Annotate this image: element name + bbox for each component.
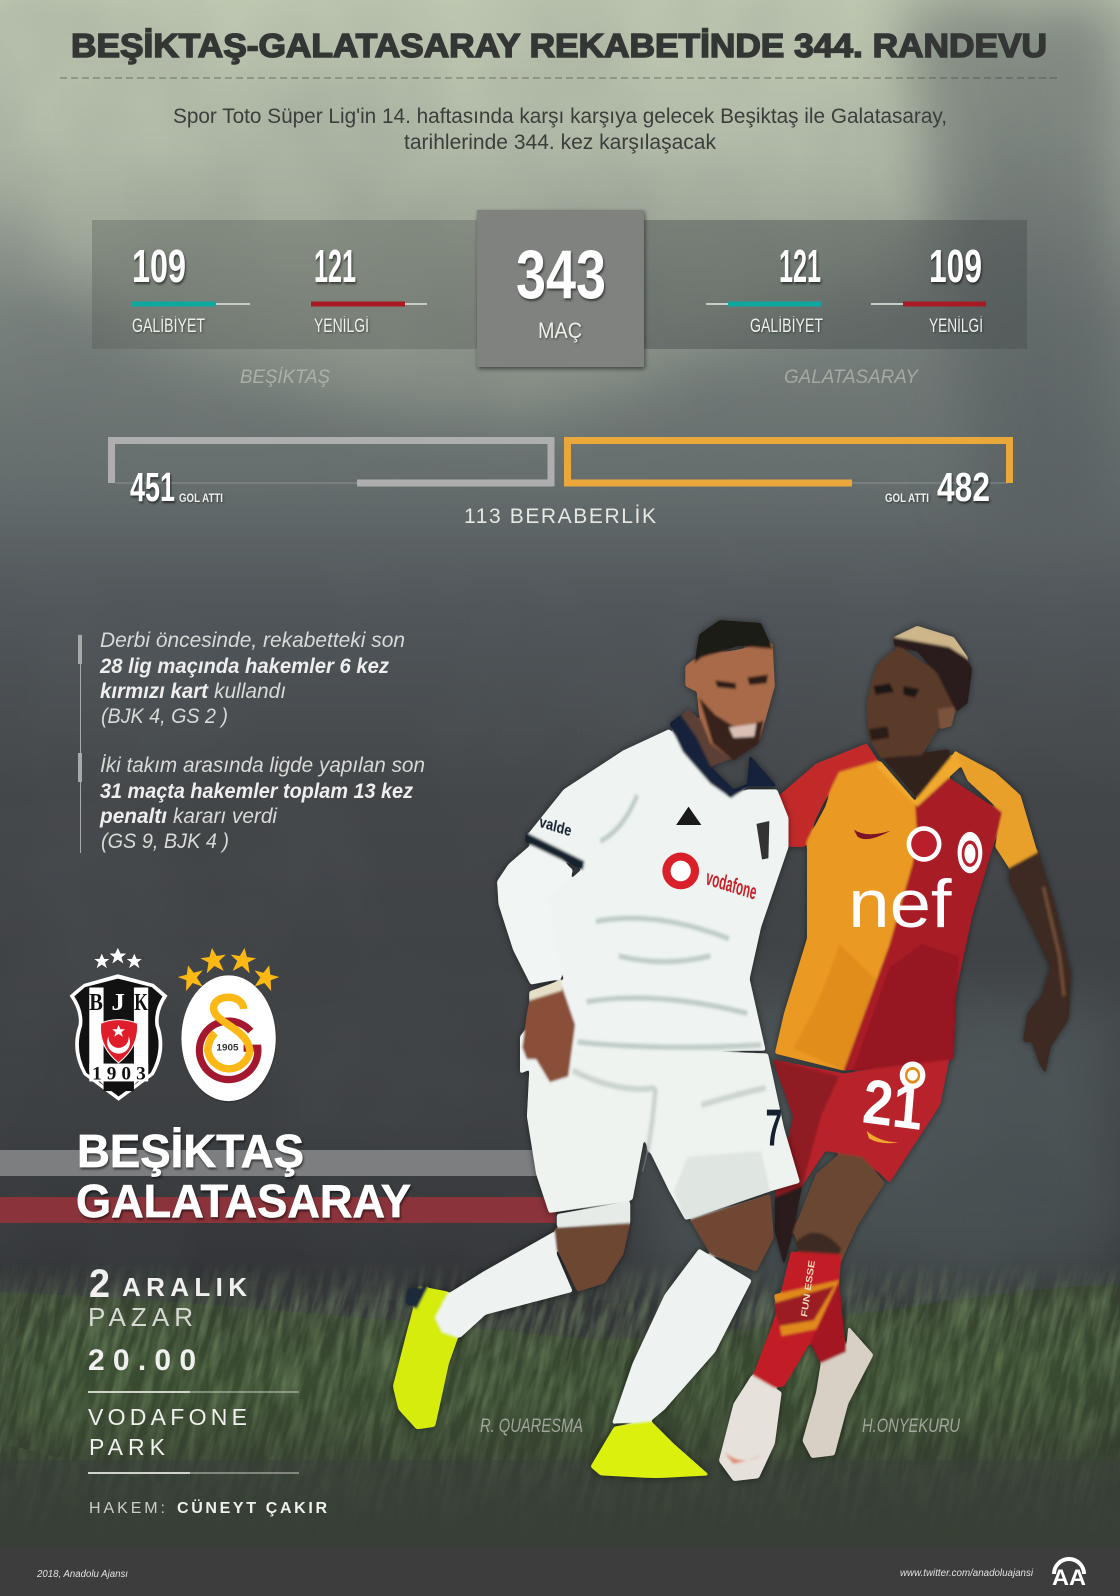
fact: red cards: 28 lig maçında hakemler 6 kez <box>99 655 389 678</box>
left boot <box>393 1286 458 1429</box>
stat: Galatasaray losses: YENİLGİ <box>929 316 983 337</box>
arm sleeve <box>497 838 573 985</box>
title: BEŞİKTAŞ-GALATASARAY REKABETİNDE 344. RANDEVU <box>71 27 1047 64</box>
label: Galatasaray: GALATASARAY <box>784 367 919 388</box>
shirt red panel <box>844 778 1002 1071</box>
back leg <box>775 1185 802 1266</box>
kit details: Galatasaray: FUN ESSE <box>800 1259 818 1318</box>
kit details: Beşiktaş <box>538 807 782 1156</box>
footer bar: www.twitter.com/anadoluajansi <box>900 1568 1034 1579</box>
fact: penalties: İki takım arasında ligde yapılan son <box>100 754 425 777</box>
fact: penalties: kararı verdi <box>173 805 278 828</box>
icon: Galatasaray crest: 1905 <box>216 1043 239 1054</box>
collar <box>876 750 961 807</box>
fact: penalties: penaltı <box>99 805 167 828</box>
stat: Beşiktaş wins <box>132 240 250 337</box>
intro text: Spor Toto Süper Lig'in 14. haftasında karşı karşıya gelecek Beşiktaş ile Galatasaray, <box>173 105 947 128</box>
hair <box>694 620 773 663</box>
panel: Beşiktaş stats <box>92 220 478 349</box>
panel: total matches: MAÇ <box>538 318 582 343</box>
sleeve band <box>525 832 584 870</box>
fact: red cards: Derbi öncesinde, rekabetteki son <box>100 629 405 652</box>
fact: penalties: 31 maçta hakemler toplam 13 kez <box>100 780 413 803</box>
footer bar: 2018, Anadolu Ajansı <box>36 1569 128 1580</box>
player: R. Quaresma <box>393 620 800 1478</box>
stat: Beşiktaş losses: YENİLGİ <box>314 316 369 337</box>
kit details: Beşiktaş: valde <box>538 814 573 841</box>
fact: penalties: (GS 9, BJK 4 ) <box>101 830 229 853</box>
icon: Anadolu Agency logo: AA <box>1052 1565 1086 1590</box>
shirt <box>520 729 789 1074</box>
left thigh <box>554 1223 630 1292</box>
shorts <box>527 1048 800 1220</box>
match heading: GALATASARAY <box>76 1175 411 1227</box>
player name: Quaresma: R. QUARESMA <box>480 1416 583 1437</box>
fact: red cards: (BJK 4, GS 2 ) <box>101 705 228 728</box>
neck and face <box>674 709 743 766</box>
match details: PARK <box>89 1434 166 1460</box>
kit details: Beşiktaş: vodafone <box>704 866 759 905</box>
kit details: Beşiktaş: 7 <box>766 1099 782 1156</box>
face <box>867 646 958 758</box>
stat: Galatasaray wins: 121 <box>779 240 821 292</box>
stat: Galatasaray wins: GALİBİYET <box>750 316 823 337</box>
icon: three white stars <box>93 947 143 969</box>
left sock <box>435 1231 573 1338</box>
match details: 2 <box>89 1262 110 1306</box>
shirt orange sleeve <box>954 750 1037 868</box>
collar <box>669 715 777 798</box>
icon: Beşiktaş crest <box>70 947 167 1101</box>
match details: CÜNEYT ÇAKIR <box>177 1498 327 1517</box>
back boot <box>802 1326 874 1458</box>
kit details: Galatasaray: nef <box>848 865 953 942</box>
shirt orange body <box>775 761 917 1071</box>
match details <box>88 1262 327 1517</box>
kit details: Galatasaray: 21 <box>860 1066 926 1144</box>
number: goals scored by Beşiktaş: GOL ATTI <box>179 491 223 505</box>
arm <box>1009 850 1071 1074</box>
stat: Beşiktaş wins: 109 <box>132 240 186 292</box>
fact: red cards: kırmızı kart <box>100 680 209 703</box>
hand <box>522 985 575 1082</box>
icon: Galatasaray crest <box>176 946 282 1101</box>
under-shorts <box>557 1202 630 1227</box>
right knee <box>690 1194 774 1272</box>
match details: PAZAR <box>88 1302 193 1332</box>
match heading: BEŞİKTAŞ <box>77 1125 304 1177</box>
panel: total matches <box>477 210 644 367</box>
number: goals scored by Beşiktaş: 451 <box>130 464 175 510</box>
draws count: 113 BERABERLİK <box>464 505 656 528</box>
match details: ARALIK <box>122 1272 247 1302</box>
right sock <box>612 1249 752 1424</box>
icon: Beşiktaş crest: 1903 <box>92 1063 146 1084</box>
match details: HAKEM: <box>89 1500 165 1517</box>
footer bar <box>0 1547 1120 1596</box>
kit details: Galatasaray <box>800 826 982 1318</box>
icon: Beşiktaş crest: B <box>89 989 103 1016</box>
panel: total matches: 343 <box>516 236 606 313</box>
match heading <box>76 1125 411 1227</box>
shorts <box>773 1059 949 1197</box>
thigh <box>793 1154 885 1269</box>
number: goals scored by Galatasaray: GOL ATTI <box>885 491 929 505</box>
number: goals scored by Galatasaray <box>885 464 990 510</box>
banner stripes <box>0 1150 556 1223</box>
fact: penalties <box>78 753 425 853</box>
chart: Galatasaray goals bracket <box>568 440 1010 510</box>
panel: Galatasaray stats <box>644 220 1027 349</box>
player name: Onyekuru: H.ONYEKURU <box>862 1416 960 1437</box>
hair <box>893 626 972 712</box>
background: blurred grass field <box>0 1260 1120 1547</box>
shirt red sleeve <box>779 744 878 847</box>
label: Beşiktaş: BEŞİKTAŞ <box>240 367 330 388</box>
number: goals scored by Galatasaray: 482 <box>937 464 990 510</box>
icon: four gold stars <box>176 946 282 992</box>
player: H. Onyekuru <box>719 626 1071 1481</box>
match details: 20.00 <box>88 1344 196 1377</box>
stat: Galatasaray losses <box>871 240 986 337</box>
sock <box>751 1251 841 1389</box>
stat: Galatasaray wins <box>706 240 823 337</box>
stat: Beşiktaş losses <box>311 240 427 337</box>
fact: red cards: kullandı <box>214 680 286 703</box>
stat: Galatasaray losses: 109 <box>929 240 982 292</box>
chart: Beşiktaş goals bracket <box>112 440 551 510</box>
intro text <box>173 105 947 154</box>
neck <box>883 749 954 798</box>
front boot <box>719 1375 782 1481</box>
match details: VODAFONE <box>88 1404 247 1430</box>
fact: red cards <box>78 629 405 753</box>
right boot <box>590 1421 710 1478</box>
icon: Beşiktaş crest: J <box>111 989 125 1016</box>
stat: Beşiktaş wins: GALİBİYET <box>132 316 205 337</box>
icon: Beşiktaş crest: K <box>134 989 148 1016</box>
stat: Beşiktaş losses: 121 <box>314 240 356 292</box>
intro text: tarihlerinde 344. kez karşılaşacak <box>404 131 716 154</box>
